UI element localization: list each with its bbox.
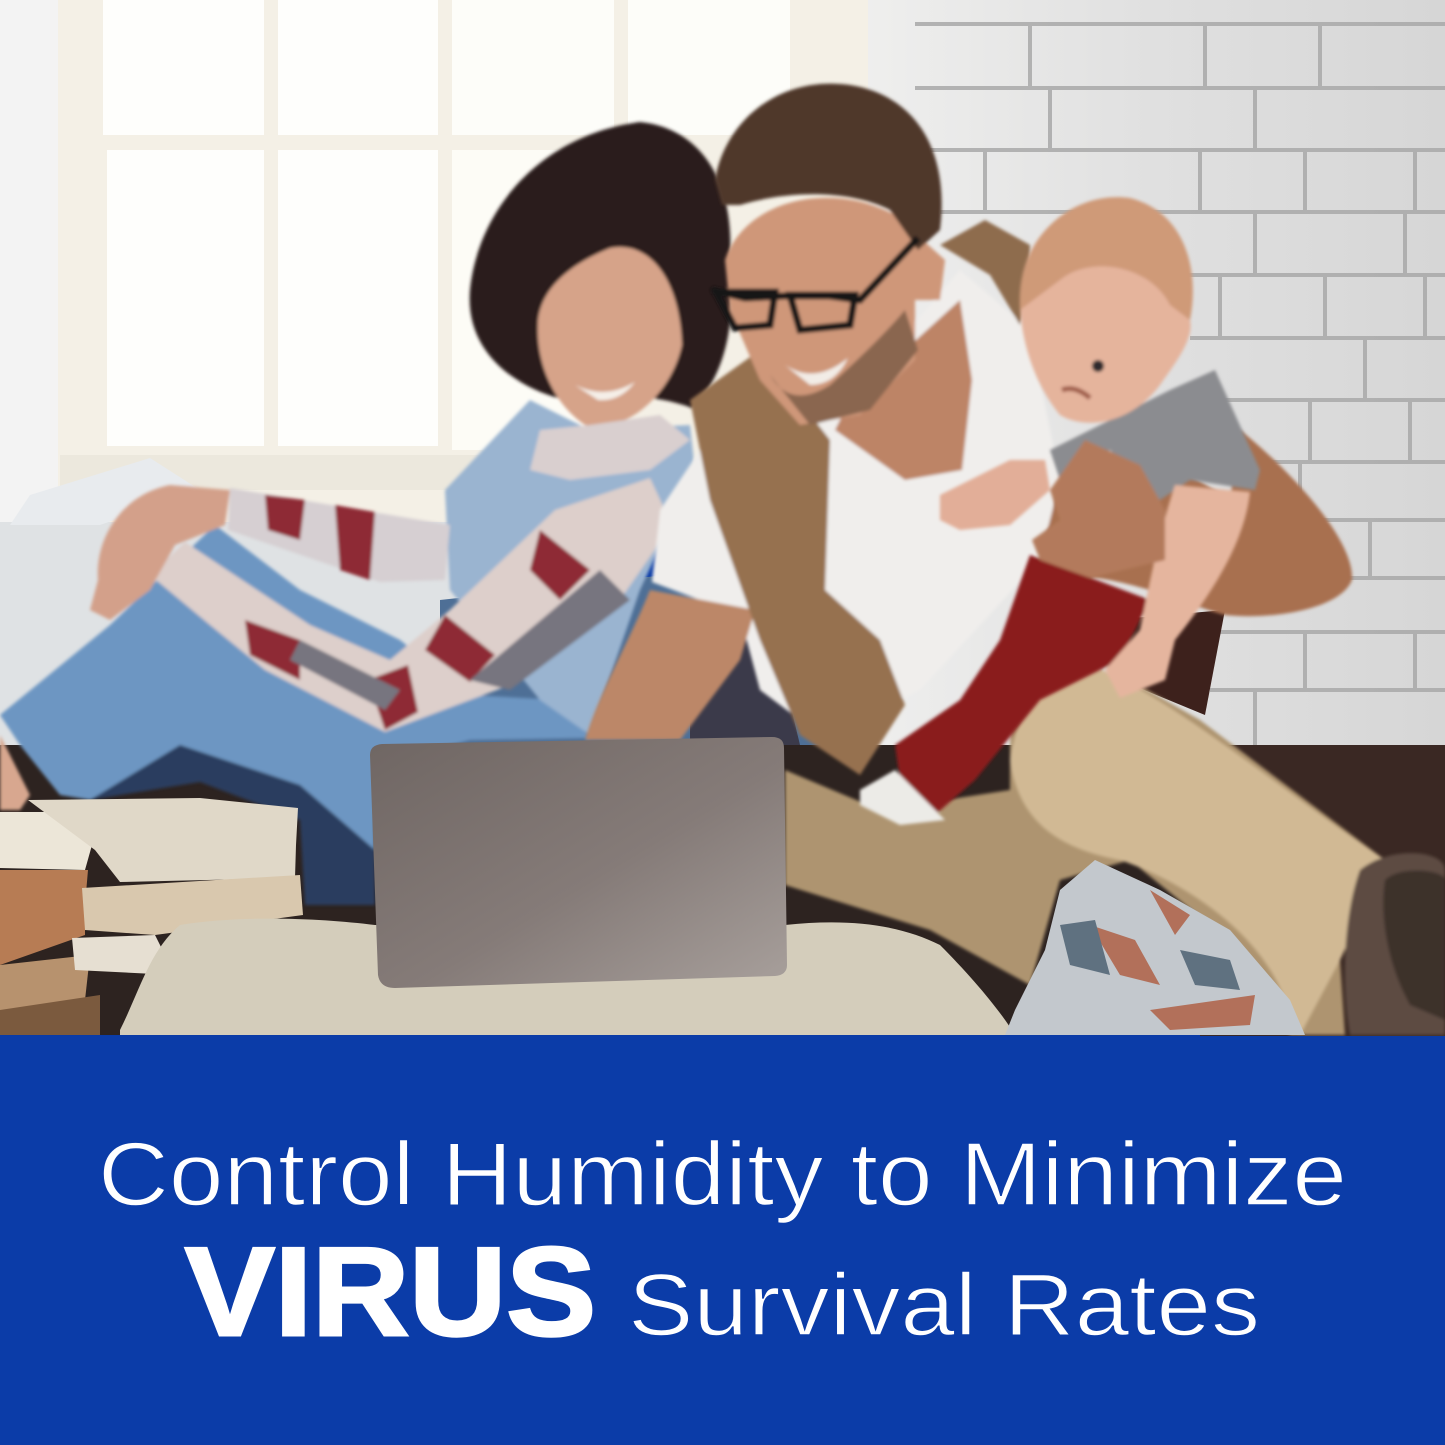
- heading line 2: Survival Rates: Survival Rates: [628, 1255, 1260, 1354]
- woman's face: [538, 247, 682, 427]
- woman's hair: [470, 122, 732, 408]
- lower wall: [0, 522, 460, 747]
- baby's arm: [1105, 485, 1250, 698]
- blanket: [1005, 860, 1305, 1035]
- woman's far sleeve: [228, 488, 450, 582]
- man's arm: [585, 590, 755, 740]
- man's beard: [770, 310, 918, 425]
- dark gap beneath baby: [1110, 610, 1225, 715]
- heading line 1: Control Humidity to Minimize: [98, 1125, 1347, 1225]
- laptop: [370, 737, 787, 988]
- woman: [0, 122, 732, 905]
- man's arm around baby: [1043, 430, 1352, 616]
- baby: [860, 197, 1260, 825]
- banner: blue text band: [0, 1036, 1445, 1445]
- woman's denim shirt: [445, 400, 695, 735]
- woman's near sleeve: [150, 478, 672, 732]
- man's face: [725, 198, 945, 425]
- man's hair: [715, 84, 942, 250]
- baby's grey shirt: [1050, 370, 1260, 500]
- heading line 2: VIRUS: VIRUS: [185, 1221, 596, 1362]
- books: [0, 798, 303, 1035]
- man's chest: [835, 300, 972, 480]
- floor: [0, 745, 1445, 1036]
- baby's red trousers: [895, 555, 1150, 815]
- shadowed clothing behind the couple: [440, 560, 820, 745]
- man's pants: [785, 655, 1385, 1035]
- man's tee: [652, 270, 1060, 735]
- window: [0, 0, 868, 525]
- brick wall: [860, 0, 1445, 750]
- man: [585, 84, 1445, 1035]
- photo: family with laptop: [0, 0, 1445, 1036]
- baby's head: [1020, 200, 1191, 423]
- pillow: [120, 919, 1015, 1035]
- man's vest: [690, 350, 905, 775]
- woman's hands: [90, 485, 230, 620]
- man's glasses: [712, 238, 918, 330]
- woman's jeans: [0, 525, 590, 850]
- woman's plaid collar: [530, 415, 690, 480]
- window-sill papers: [10, 458, 200, 525]
- man's hand holding baby: [1032, 440, 1165, 578]
- man's boot: [1345, 853, 1445, 1035]
